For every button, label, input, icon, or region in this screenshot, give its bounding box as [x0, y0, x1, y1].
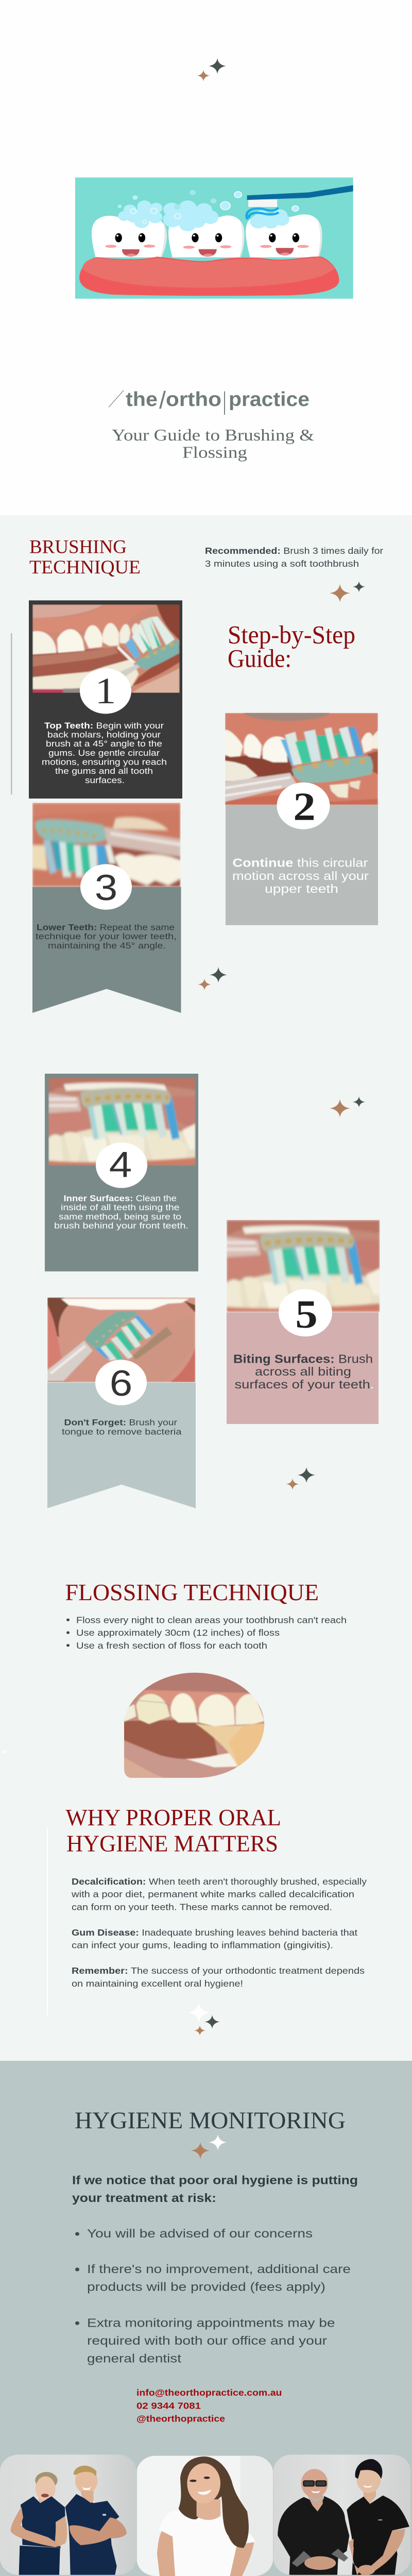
- text block: why hygiene matters: with a poor diet, permanent white marks called decalcification: [71, 1889, 354, 1899]
- number 5: [279, 1289, 332, 1336]
- heading: flossing technique: FLOSSING TECHNIQUE: [65, 1580, 319, 1605]
- illustration: smiling teeth being brushed: [75, 178, 353, 299]
- sparkles: recommendation: [330, 581, 365, 602]
- logo: the ortho practice: [109, 386, 310, 415]
- text block: why hygiene matters: can form on your teeth. These marks cannot be removed.: [72, 1902, 332, 1912]
- logo: the ortho practice: /: [159, 386, 166, 414]
- tooth left: [92, 216, 167, 258]
- list: monitoring steps: Extra monitoring appointments may be: [87, 2317, 335, 2330]
- text: lower teeth: technique for your lower teeth,: [36, 931, 177, 941]
- tooth right: [246, 214, 322, 258]
- text: biting surfaces: surfaces of your teeth .: [235, 1378, 374, 1392]
- list: flossing tips: Floss every night to clean areas your toothbrush can't reach: [76, 1615, 347, 1625]
- text: biting surfaces: [233, 1353, 374, 1392]
- contact details: 02 9344 7081: [136, 2401, 201, 2411]
- list: monitoring steps: required with both our office and your: [87, 2334, 327, 2347]
- text block: why hygiene matters: Decalcification: When teeth aren't thoroughly brushed, especially: [72, 1876, 367, 1887]
- text: inner surfaces: same method, being sure to: [59, 1212, 181, 1222]
- number 1: 1: [95, 670, 116, 711]
- heading: hygiene monitoring: HYGIENE MONITORING: [75, 2107, 346, 2133]
- subtitle: Your Guide to Brushing &: [112, 427, 314, 444]
- text: inner surfaces: inside of all teeth using the: [61, 1202, 180, 1212]
- text: monitoring intro: your treatment at risk:: [72, 2192, 216, 2205]
- contact details: info@theorthopractice.com.au: [136, 2387, 282, 2398]
- heading: why proper oral hygiene matters: [66, 1805, 281, 1857]
- text: top teeth: gums. Use gentle circular: [48, 748, 160, 758]
- white intro background: [0, 0, 412, 515]
- hygiene monitoring background: [0, 2061, 412, 2576]
- text block: why hygiene matters: can infect your gums, leading to inflammation (gingivitis).: [72, 1940, 333, 1950]
- photo: brush on lower teeth: [32, 803, 181, 887]
- heading: step by step guide: Step-by-Step: [228, 621, 355, 649]
- photo: brush on biting surfaces: [227, 1220, 380, 1312]
- bubbles: [117, 190, 299, 224]
- logo: the ortho practice: |: [223, 387, 226, 415]
- text: top teeth: brush at a 45° angle to the: [46, 739, 162, 749]
- number 6: 6: [110, 1363, 132, 1403]
- heading: brushing technique: BRUSHING: [29, 536, 127, 557]
- list: monitoring steps: general dentist: [87, 2352, 181, 2365]
- text: continue circular motion: [232, 857, 369, 896]
- text: don't forget: [62, 1418, 182, 1436]
- text: biting surfaces: Biting Surfaces: Brush: [233, 1353, 373, 1366]
- text: top teeth: surfaces.: [85, 775, 125, 785]
- sparkles: beside step 4: [330, 1096, 365, 1117]
- text: inner surfaces: [54, 1194, 188, 1230]
- panel: step 6 tongue: [47, 1297, 196, 1508]
- text: top teeth: motions, ensuring you reach: [42, 757, 167, 767]
- text: lower teeth: [36, 922, 177, 951]
- sparkles: after step 6: [286, 1467, 315, 1490]
- number 2: [277, 783, 330, 829]
- text: biting surfaces: across all biting: [255, 1366, 351, 1379]
- recommendation text: Recommended: Brush 3 times daily for: [205, 546, 383, 556]
- logo: the ortho practice: the: [126, 387, 158, 410]
- sparkles: after step 3: [198, 967, 227, 990]
- photo: team member in white tee: [137, 2456, 273, 2576]
- sparkles: monitoring: [191, 2134, 227, 2159]
- photo: team pair in black: [273, 2454, 410, 2575]
- subtitle: Flossing: [182, 444, 247, 462]
- text: top teeth: [42, 721, 167, 785]
- text: top teeth: back molars, holding your: [47, 730, 161, 739]
- small white sparkle: [2, 1749, 8, 1755]
- number 5: 5: [295, 1292, 318, 1336]
- text: don't forget: tongue to remove bacteria: [62, 1427, 182, 1436]
- text: continue circular motion: motion across all your: [232, 870, 369, 883]
- list: monitoring steps: [75, 2227, 351, 2365]
- photo: team pair in navy scrubs: [0, 2454, 136, 2575]
- gums: [79, 257, 339, 296]
- text block: why hygiene matters: Gum Disease: Inadequate brushing leaves behind bacteria that: [72, 1927, 358, 1938]
- text block: why hygiene matters: [71, 1876, 367, 1989]
- contact details: [136, 2387, 282, 2424]
- list: flossing tips: Use a fresh section of floss for each tooth: [76, 1640, 267, 1651]
- number 6: [95, 1360, 147, 1405]
- list: monitoring steps: If there's no improvement, additional care: [87, 2263, 351, 2276]
- panel: step 5 biting surfaces: [227, 1220, 380, 1424]
- text: inner surfaces: brush behind your front teeth.: [54, 1221, 188, 1230]
- heading: why proper oral hygiene matters: WHY PROPER ORAL: [66, 1805, 281, 1831]
- number 4: 4: [109, 1144, 132, 1185]
- sparkles: intro: [197, 58, 226, 81]
- panel: step 2 continue: [225, 703, 378, 925]
- text: top teeth: the gums and all tooth: [55, 766, 153, 776]
- recommendation text: [205, 546, 383, 569]
- text: continue circular motion: upper teeth: [265, 883, 338, 896]
- decorative side line marker: [11, 633, 12, 794]
- panel: step 4 inner surfaces: [45, 1074, 198, 1272]
- heading: brushing technique: TECHNIQUE: [29, 556, 141, 578]
- number 1: [80, 668, 131, 714]
- logo: the ortho practice: practice: [229, 387, 310, 410]
- heading: step by step guide: [228, 621, 355, 673]
- photo: flossing teeth: [122, 1671, 267, 1780]
- decorative white side line: [47, 1827, 48, 2015]
- text block: why hygiene matters: Remember: The success of your orthodontic treatment depends: [72, 1965, 365, 1976]
- text: lower teeth: Lower Teeth: Repeat the same: [37, 922, 175, 932]
- panel: step 3 lower teeth: [32, 803, 181, 1013]
- number 2: 2: [293, 785, 316, 828]
- list: monitoring steps: products will be provided (fees apply): [87, 2281, 325, 2294]
- photo: brush across upper teeth: [225, 703, 378, 805]
- sparkles: end of why section: [187, 2003, 220, 2036]
- text: don't forget: Don't Forget: Brush your: [64, 1418, 177, 1427]
- text: top teeth: Top Teeth: Begin with your: [44, 721, 164, 731]
- photo: brush behind front teeth: [48, 1077, 196, 1166]
- panel: step 1 top teeth: [29, 600, 182, 799]
- text: inner surfaces: Inner Surfaces: Clean the: [64, 1194, 177, 1203]
- foam: [118, 200, 289, 231]
- photo: brush on top teeth: [32, 604, 180, 693]
- toothbrush: [248, 199, 277, 207]
- number 3: [80, 864, 132, 910]
- recommendation text: 3 minutes using a soft toothbrush: [205, 558, 359, 569]
- heading: step by step guide: Guide:: [228, 645, 291, 673]
- light technique background: [0, 515, 412, 2061]
- heading: brushing technique: [29, 536, 141, 578]
- text: monitoring intro: [72, 2174, 358, 2205]
- number 4: [96, 1143, 147, 1188]
- list: flossing tips: [66, 1615, 347, 1651]
- logo: the ortho practice: ortho: [166, 387, 221, 410]
- heading: why proper oral hygiene matters: HYGIENE MATTERS: [66, 1831, 278, 1857]
- text: monitoring intro: If we notice that poor oral hygiene is putting: [72, 2174, 358, 2187]
- number 3: 3: [95, 867, 117, 908]
- contact details: @theorthopractice: [136, 2413, 225, 2424]
- subtitle: [112, 427, 314, 462]
- text block: why hygiene matters: on maintaining excellent oral hygiene!: [72, 1978, 243, 1989]
- tooth middle: [168, 215, 244, 258]
- text: lower teeth: maintaining the 45° angle.: [48, 941, 166, 951]
- photo: brush on tongue: [47, 1297, 195, 1382]
- list: monitoring steps: You will be advised of our concerns: [87, 2227, 313, 2241]
- text: continue circular motion: Continue this circular: [233, 857, 368, 870]
- list: flossing tips: Use approximately 30cm (12 inches) of floss: [76, 1628, 280, 1638]
